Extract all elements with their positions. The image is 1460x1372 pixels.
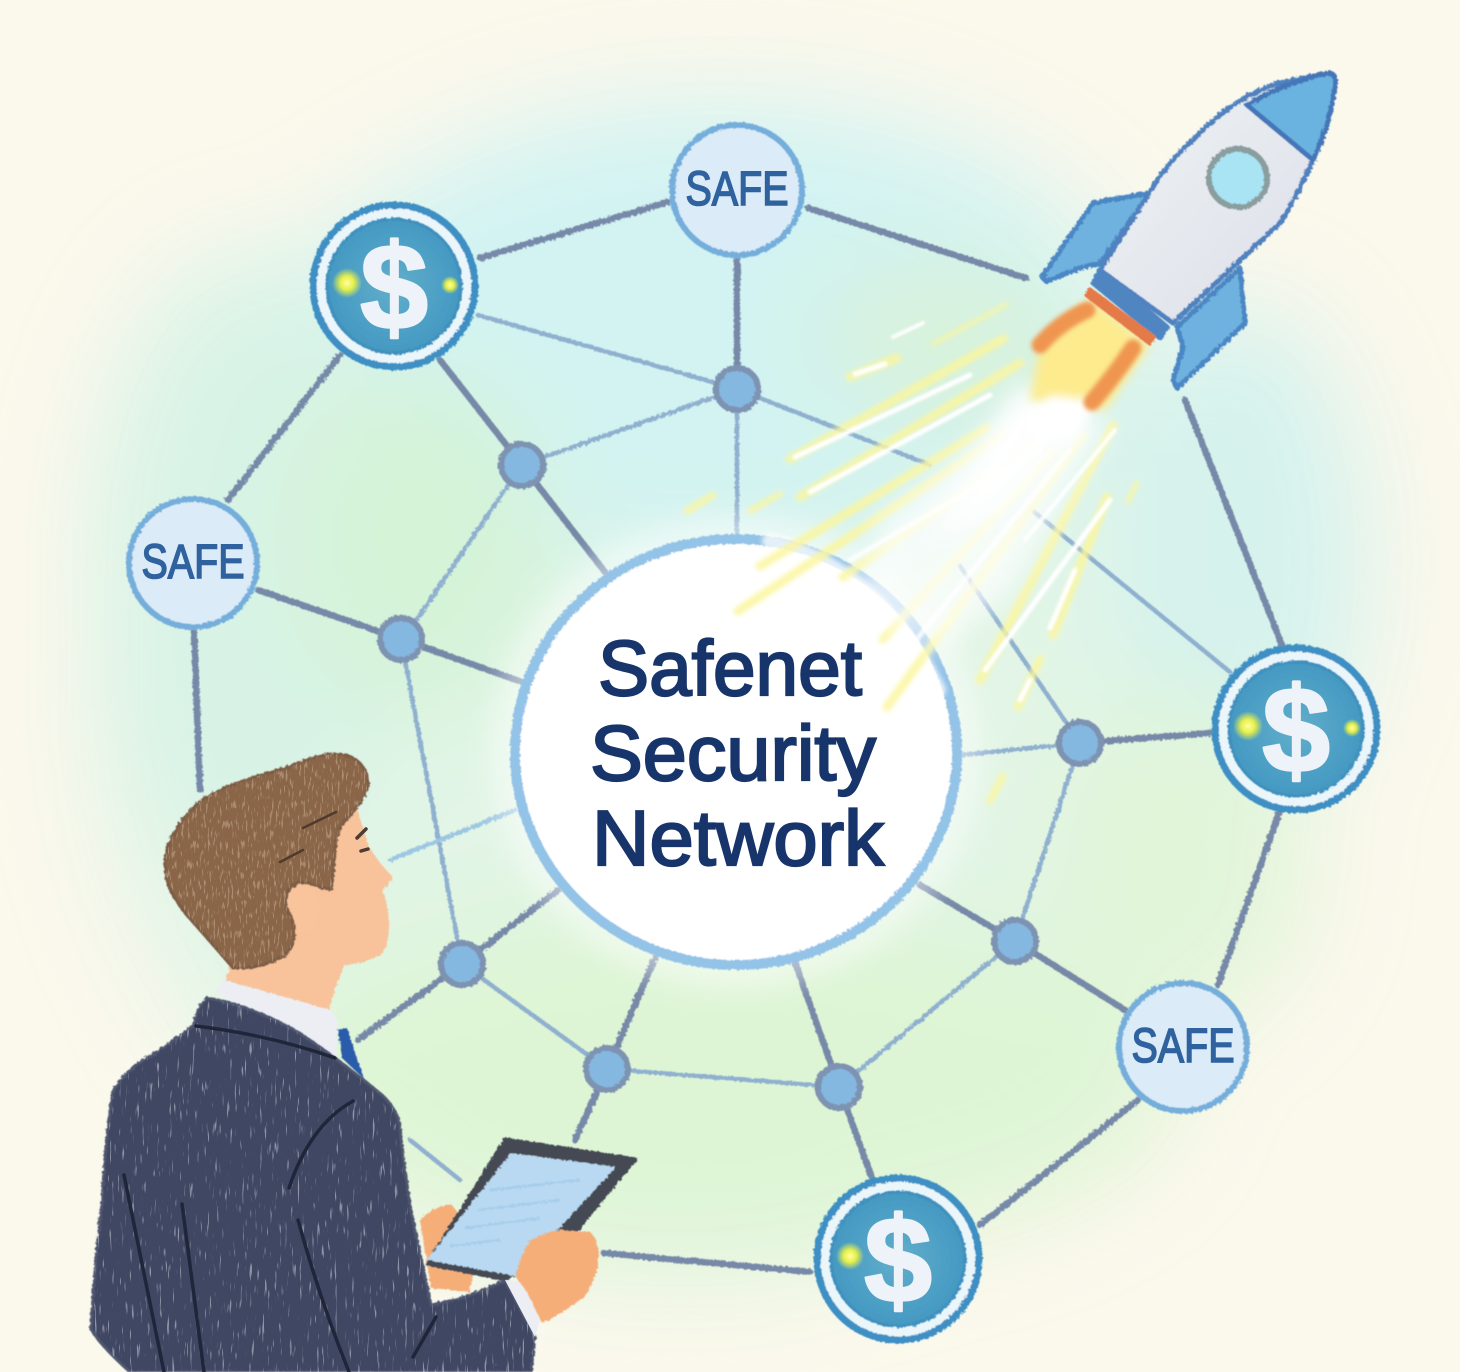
rocket exhaust beam <box>687 304 1137 801</box>
SAFE node top <box>672 125 802 255</box>
left hand behind tablet <box>420 1204 480 1292</box>
thick links <box>194 202 1282 1272</box>
SAFE node lower right: SAFE <box>1132 1020 1234 1073</box>
window <box>1209 149 1267 207</box>
title: Network <box>592 794 885 882</box>
jacket <box>91 998 535 1372</box>
engine band <box>1093 270 1167 338</box>
person with tablet <box>80 740 636 1372</box>
hair texture <box>166 754 367 968</box>
title: Safenet <box>598 624 862 712</box>
title: Security <box>590 709 876 797</box>
nose cone <box>1247 73 1335 160</box>
shirt collar <box>216 980 338 1062</box>
shirt cuff <box>505 1280 540 1337</box>
title <box>590 624 885 882</box>
dollar token right: $ <box>1262 662 1330 798</box>
SAFE node left <box>129 499 257 627</box>
SAFE node top: SAFE <box>686 163 788 216</box>
fading of hub outline under beam <box>770 541 938 690</box>
dollar token upper left: $ <box>360 219 428 355</box>
rocket flame <box>1020 298 1150 440</box>
hair <box>165 754 368 968</box>
tablet <box>427 1139 636 1280</box>
neck and face <box>224 800 393 1012</box>
right fin <box>1173 268 1245 388</box>
dollar token bottom: $ <box>864 1192 932 1328</box>
small network nodes <box>380 368 1101 1108</box>
jacket seams <box>124 1026 436 1372</box>
dollar token upper left <box>313 205 475 367</box>
body <box>1100 73 1335 323</box>
eye and brow <box>357 829 368 851</box>
network connections <box>194 202 1282 1272</box>
left fin <box>1042 193 1150 282</box>
SAFE node lower right <box>1119 983 1247 1111</box>
orange nozzle <box>1087 290 1153 343</box>
tie <box>338 1028 364 1079</box>
jacket chalk texture <box>80 990 550 1372</box>
dollar token bottom <box>817 1178 979 1340</box>
central hub circle <box>490 514 982 990</box>
rocket <box>1042 73 1335 388</box>
SAFE node left: SAFE <box>142 536 244 589</box>
dollar token right <box>1215 648 1377 810</box>
right hand <box>515 1230 598 1323</box>
ear <box>283 884 319 932</box>
thin links <box>390 315 1230 1180</box>
